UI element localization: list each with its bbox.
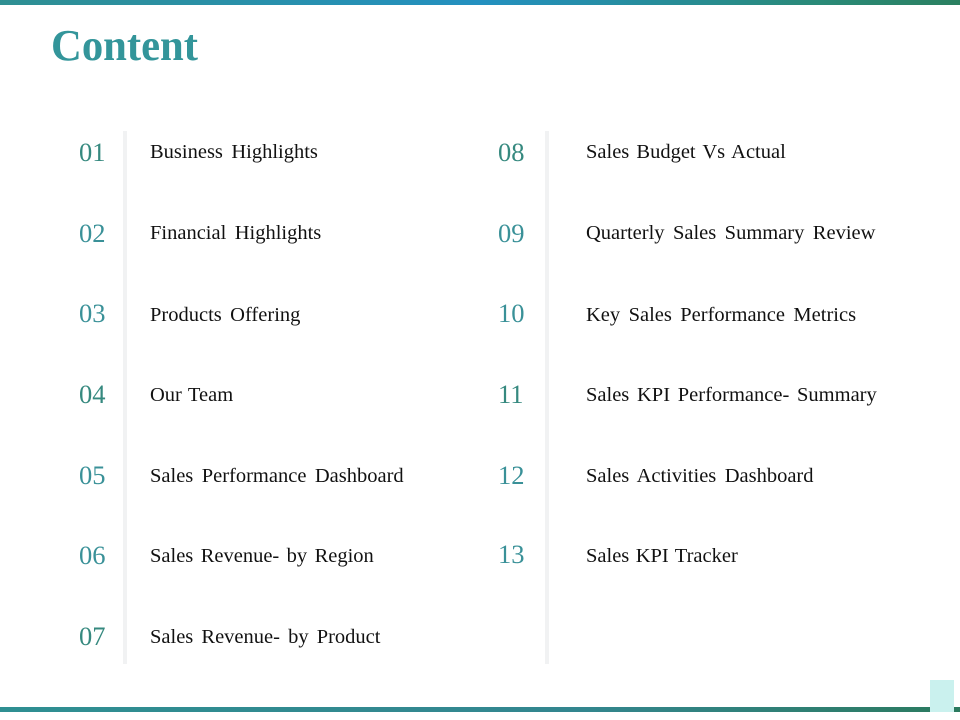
right column divider [545,131,549,664]
item: Financial Highlights: Financial Highlights [150,222,321,244]
number 09: 09 [498,218,524,248]
number 10: 10 [498,298,524,328]
title: Content [51,21,198,70]
item: Sales KPI Performance- Summary: Sales KPI Performance- Summary [586,384,877,406]
number 05: 05 [79,460,106,490]
item: Products Offering: Products Offering [150,304,300,326]
number 03: 03 [79,298,106,328]
item: Sales Revenue- by Product: Sales Revenue- by Product [150,626,380,648]
number 12: 12 [498,460,524,490]
item: Key Sales Performance Metrics: Key Sales Performance Metrics [586,304,856,326]
item: Business Highlights: Business Highlights [150,141,318,163]
page number tab [930,680,954,712]
item: Sales Budget Vs Actual: Sales Budget Vs Actual [586,141,786,163]
item: Sales KPI Tracker: Sales KPI Tracker [586,545,738,567]
number 04: 04 [79,379,106,409]
number 01: 01 [79,137,106,167]
top gradient bar [0,0,960,5]
item: Sales Performance Dashboard: Sales Performance Dashboard [150,465,404,487]
number 07: 07 [79,621,106,651]
left column divider [123,131,127,664]
number 11: 11 [498,379,524,409]
bottom gradient bar [0,707,960,712]
item: Sales Revenue- by Region: Sales Revenue- by Region [150,545,374,567]
number 06: 06 [79,540,106,570]
item: Our Team: Our Team [150,384,233,406]
item: Sales Activities Dashboard: Sales Activities Dashboard [586,465,814,487]
item: Quarterly Sales Summary Review: Quarterly Sales Summary Review [586,222,875,244]
number 02: 02 [79,218,106,248]
number 08: 08 [498,137,524,167]
number 13: 13 [498,539,524,569]
